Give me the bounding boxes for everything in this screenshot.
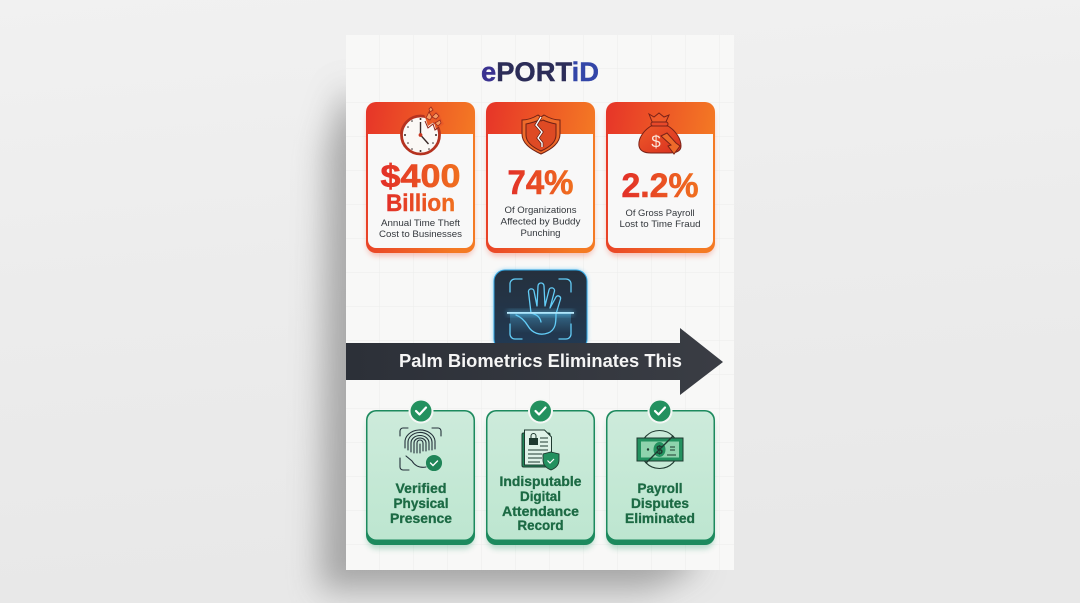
- icon: money bag with down arrow: [639, 113, 681, 154]
- label: indisputable digital attendance record: Indisputable: [500, 473, 582, 489]
- panel: payroll disputes eliminated: [606, 398, 715, 549]
- label: payroll disputes eliminated: [625, 480, 695, 526]
- label: verified physical presence: Verified: [396, 480, 446, 496]
- caption: organizations affected: Of Organizations: [504, 205, 577, 216]
- label: indisputable digital attendance record: Digital: [520, 488, 561, 504]
- logo: ePORTiD: ePORTiD: [481, 57, 599, 87]
- caption: organizations affected: Affected by Buddy: [500, 216, 581, 228]
- icon: palm scanner: [494, 270, 587, 350]
- icon: fingerprint scan: [400, 428, 442, 470]
- caption: gross payroll: Lost to Time Fraud: [620, 219, 700, 230]
- label: indisputable digital attendance record: Record: [518, 517, 564, 533]
- panel: time theft cost: [366, 102, 475, 256]
- label: indisputable digital attendance record: Attendance: [502, 503, 579, 519]
- label: payroll disputes eliminated: Eliminated: [625, 510, 695, 526]
- arrow banner: Palm Biometrics Eliminates This: Palm Biometrics Eliminates This: [399, 351, 682, 371]
- caption: annual time theft: [379, 218, 462, 240]
- stat: 2.2%: 2.2%: [622, 167, 698, 205]
- stat: $400 Billion: $400: [380, 158, 460, 194]
- label: indisputable digital attendance record: [500, 473, 582, 533]
- caption: organizations affected: Punching: [520, 228, 560, 239]
- icon: cracked shield: [522, 115, 560, 154]
- label: verified physical presence: [390, 480, 452, 526]
- stat: $400 Billion: Billion: [386, 190, 455, 217]
- stat: $400 Billion: [380, 158, 460, 217]
- icon: locked document with shield: [522, 430, 559, 470]
- icon: crossed-out banknote: $: [656, 443, 663, 457]
- badge: check: [528, 398, 553, 424]
- stat: 74%: 74%: [508, 164, 574, 202]
- caption: organizations affected: [500, 205, 581, 239]
- label: verified physical presence: Physical: [394, 495, 448, 511]
- caption: gross payroll: [620, 208, 700, 230]
- caption: annual time theft: Cost to Businesses: [379, 229, 462, 240]
- badge: check: [408, 398, 434, 424]
- panel: gross payroll lost: [606, 102, 715, 256]
- caption: annual time theft: Annual Time Theft: [381, 218, 460, 229]
- icon: broken clock: [402, 107, 444, 154]
- icon: crossed-out banknote: [637, 430, 683, 468]
- caption: gross payroll: Of Gross Payroll: [626, 208, 694, 219]
- icon: money bag with down arrow: $: [651, 132, 661, 151]
- panel: indisputable digital attendance record: [486, 398, 595, 549]
- badge: check: [648, 398, 672, 424]
- panel: buddy punching: [486, 102, 595, 256]
- arrow banner: Palm Biometrics Eliminates This: [346, 328, 723, 395]
- paper shadow: [320, 85, 700, 590]
- label: payroll disputes eliminated: Payroll: [638, 480, 682, 496]
- panel: verified physical presence: [366, 398, 475, 549]
- label: payroll disputes eliminated: Disputes: [631, 495, 689, 511]
- poster sheet: [346, 35, 734, 570]
- label: verified physical presence: Presence: [390, 510, 452, 526]
